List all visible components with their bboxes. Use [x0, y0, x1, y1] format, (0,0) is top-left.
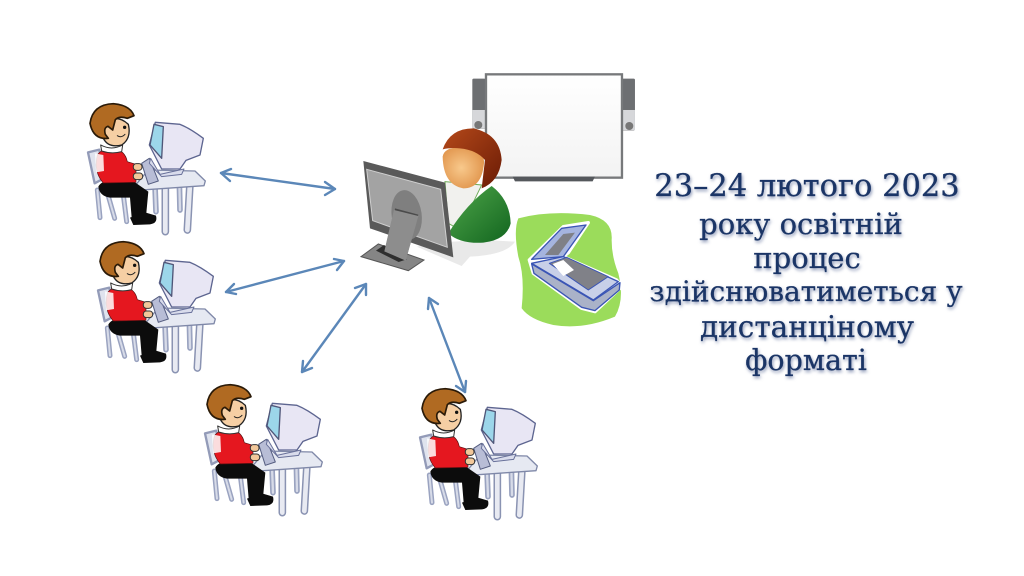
announcement text — [649, 169, 964, 380]
scanner — [529, 223, 622, 312]
arrow: middle left student to teacher — [226, 259, 344, 294]
whiteboard panel — [486, 74, 622, 178]
student workstation middle left — [98, 242, 215, 370]
teacher with monitor — [361, 128, 515, 271]
monitor back — [361, 161, 453, 271]
arrow: top left student to teacher — [221, 169, 335, 195]
arrow: bottom right student to teacher — [428, 298, 466, 392]
arrow: bottom left student to teacher — [302, 284, 366, 372]
scanner on green blob — [516, 213, 622, 326]
student workstation top left — [88, 104, 205, 232]
whiteboard tray — [513, 177, 595, 181]
line 2: року освітній — [699, 207, 903, 241]
teacher body — [445, 182, 511, 243]
whiteboard speakers — [472, 79, 635, 130]
line 1: 23–24 лютого 2023 — [654, 169, 960, 204]
line 4: здійснюватиметься у — [649, 275, 963, 308]
teacher head — [443, 128, 502, 188]
line 3: процес — [753, 241, 861, 275]
line 6: форматі — [745, 344, 867, 377]
student workstation bottom right — [420, 389, 537, 517]
green blob — [516, 213, 621, 326]
student workstation bottom left — [205, 385, 322, 513]
line 5: дистанціному — [700, 310, 914, 344]
interactive whiteboard — [472, 74, 635, 181]
desk shadow — [417, 240, 515, 266]
